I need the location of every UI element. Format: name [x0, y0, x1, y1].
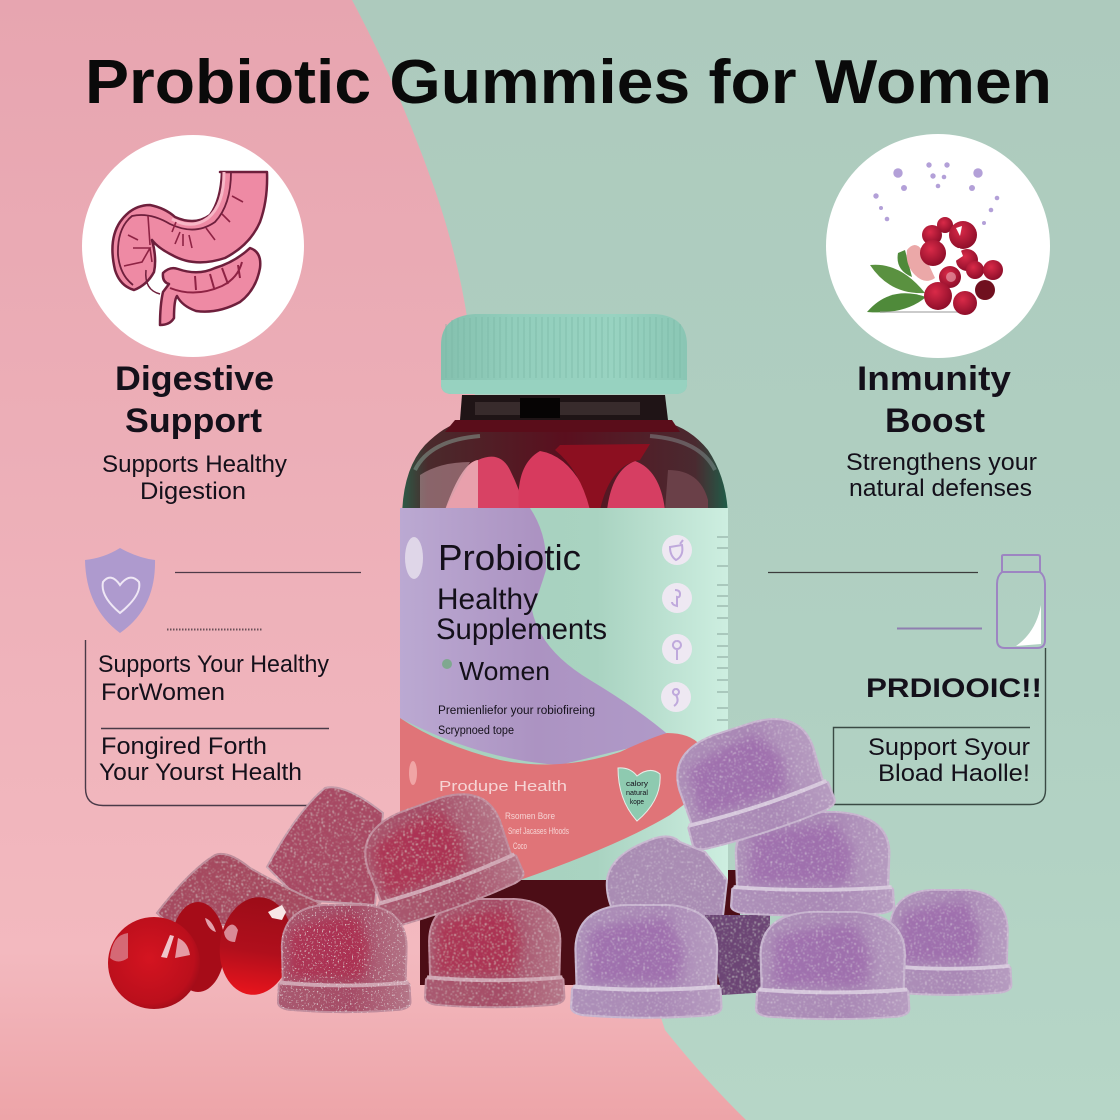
text: fongired forth [99, 733, 302, 786]
callout frame [86, 640, 329, 806]
text: support syour: Support Syour [868, 734, 1030, 761]
icon: shield with heart [85, 548, 155, 633]
red gel berries [108, 892, 298, 1009]
label: heart badge [618, 768, 660, 821]
gummy: purple middle [731, 812, 894, 916]
text: supports your healthy for women: ForWomen [101, 679, 225, 706]
label: small text [438, 705, 595, 737]
text: strengthens your natural defenses [846, 449, 1037, 502]
text: fongired forth: Your Yourst Health [99, 759, 302, 786]
text: prdiooic: PRDIOOIC!! [866, 673, 1042, 703]
label: nutrition panel [717, 537, 728, 720]
gummies inside [420, 444, 708, 510]
bottle lower glass [420, 870, 740, 985]
heading: digestive support [115, 360, 274, 440]
gummy: purple behind [705, 915, 770, 995]
gummy: red bottom center [425, 899, 564, 1007]
text: supports healthy digestion: Digestion [140, 478, 246, 505]
label: brand text [436, 537, 607, 686]
gummy: purple back [607, 836, 727, 925]
neck [460, 395, 668, 420]
gummy: red bottom left [278, 905, 410, 1012]
text: supports healthy digestion: Supports Healthy [102, 451, 287, 478]
heading: digestive support: Support [125, 402, 262, 440]
text: fongired forth: Fongired Forth [101, 733, 267, 760]
panel: left callout [85, 548, 361, 806]
text: strengthens your natural defenses: natural defenses [849, 475, 1032, 502]
gummy: purple bottom left [571, 905, 722, 1018]
label: produpe health: Snef Jacases Hfoods [508, 826, 569, 837]
label: produpe health: Produpe Health [439, 778, 567, 795]
label: benefit icons [661, 535, 692, 712]
label: produpe health [409, 761, 569, 852]
text: supports your healthy for women [98, 651, 329, 706]
panel: immunity boost [826, 134, 1050, 502]
label: produpe health: Rsomen Bore [505, 811, 555, 822]
label: heart badge: calory [626, 781, 649, 788]
gummy: red tilted [350, 780, 527, 933]
label: purple blob [400, 508, 672, 765]
text: support syour [868, 734, 1030, 787]
bottle cap [441, 314, 687, 394]
title: Probiotic Gummies for Women [85, 48, 1052, 117]
text: supports healthy digestion [102, 451, 287, 505]
panel: digestive support [82, 135, 304, 505]
heading: digestive support: Digestive [115, 360, 274, 398]
label: heart badge: natural [626, 790, 648, 797]
icon: cranberries [826, 134, 1050, 358]
heading: immunity boost [857, 360, 1011, 440]
label: brand text: Probiotic [438, 537, 581, 578]
label: produpe health: Coco [513, 841, 527, 852]
dots [873, 162, 999, 225]
glass body [402, 395, 728, 570]
heading: immunity boost: Boost [885, 402, 985, 440]
label: brand text: Supplements [436, 613, 607, 646]
callout frame [834, 648, 1046, 805]
label: heart badge: kope [630, 799, 644, 806]
label: brand text: Healthy [437, 583, 538, 616]
heading: immunity boost: Inmunity [857, 360, 1011, 398]
gummy: red left [157, 854, 320, 925]
shoulder band [445, 420, 680, 432]
gummy: red bottom left overlap [278, 905, 410, 1012]
gummy: purple bottom right [756, 912, 909, 1019]
label: small text: Premienliefor your robiofireing [438, 705, 595, 717]
gummy: purple far right [886, 890, 1011, 995]
icon: jar [997, 555, 1045, 648]
label: base mint [400, 508, 728, 880]
text: strengthens your natural defenses: Strengthens your [846, 449, 1037, 476]
label: coral band [400, 718, 700, 880]
label: brand text: Women [459, 656, 550, 686]
icon: digestive system [82, 135, 304, 357]
gummy: purple tilted [662, 706, 838, 855]
text: support syour: Bload Haolle! [878, 760, 1030, 787]
label: left circle [405, 537, 423, 579]
text: supports your healthy for women: Supports Your Healthy [98, 651, 329, 678]
label: small text: Scrypnoed tope [438, 725, 514, 737]
gummies: pile [157, 706, 1011, 1019]
gummy: red back [267, 787, 383, 905]
panel: right callout [768, 555, 1046, 805]
bottle [400, 314, 740, 985]
